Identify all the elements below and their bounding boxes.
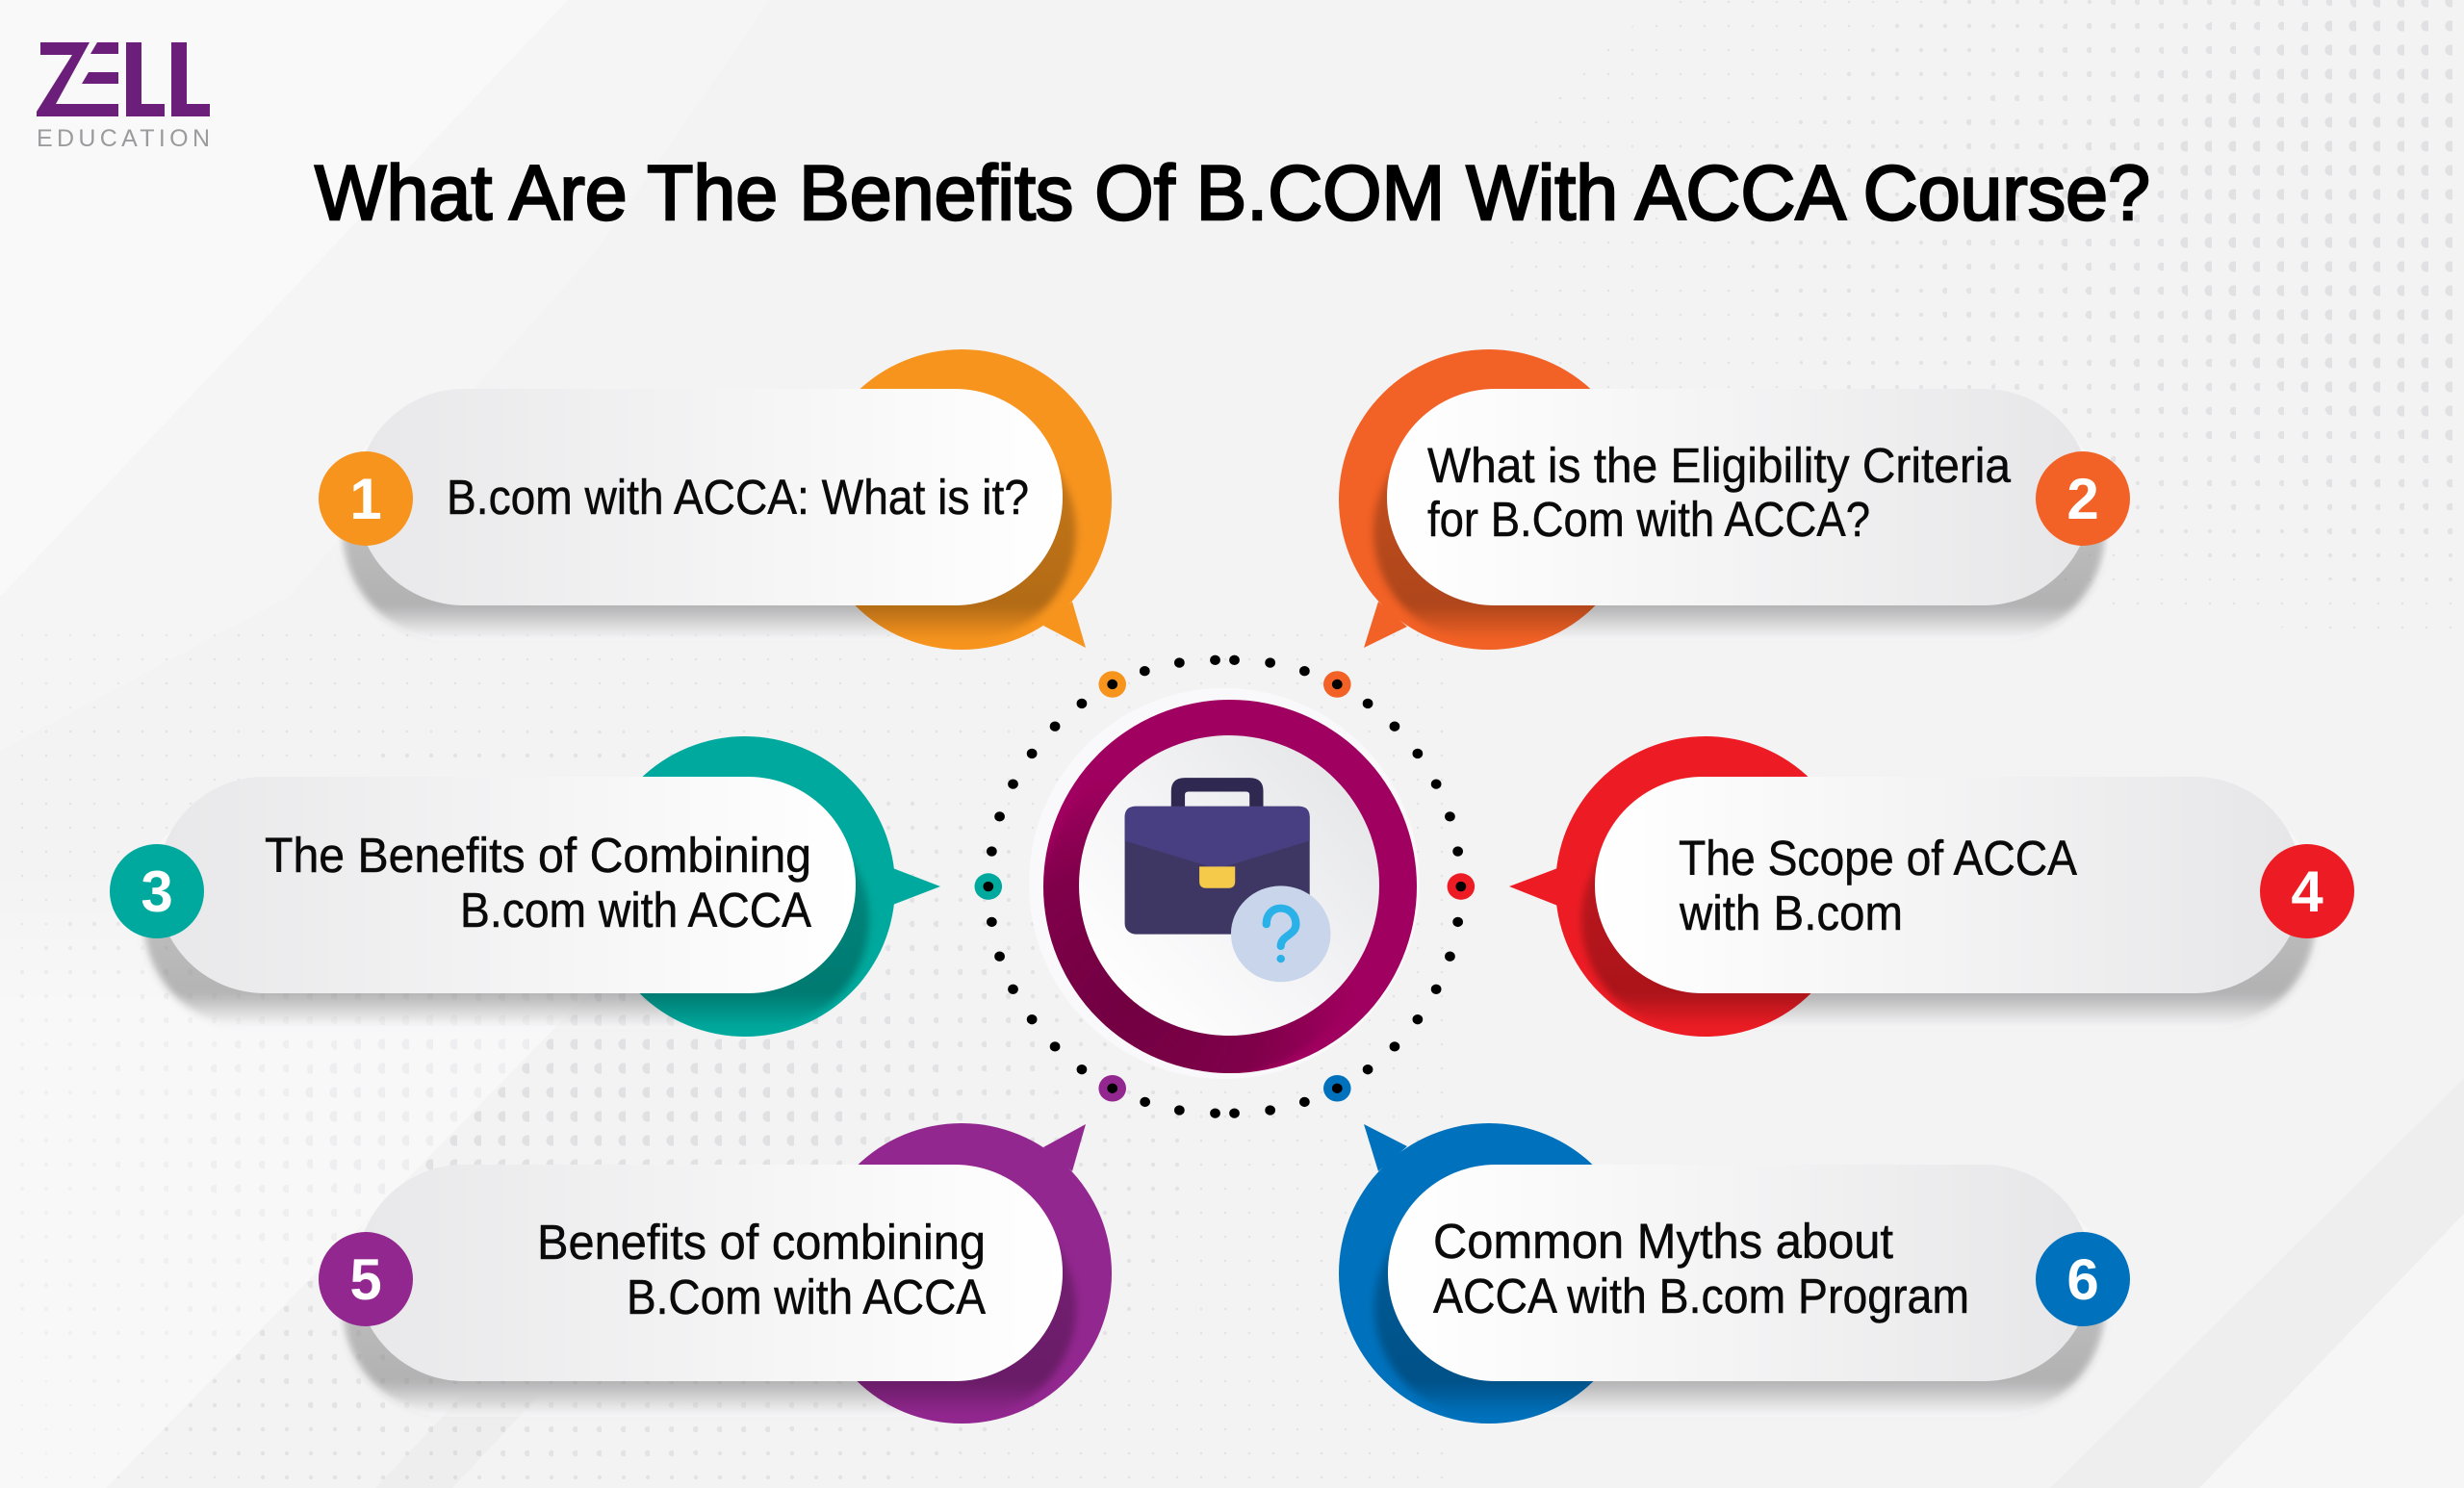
number badge 6 — [2036, 1232, 2130, 1326]
panel 4: scope of ACCA — [1509, 736, 2354, 1037]
purple speech bubble — [811, 1123, 1112, 1424]
label 5: Benefits of combining — [537, 1215, 986, 1270]
icon: briefcase with question mark — [1125, 778, 1330, 982]
label 6: ACCA with B.com Program — [1433, 1269, 1969, 1323]
number badge 1 — [319, 451, 413, 546]
panel 5: benefits of combining B.Com — [319, 1123, 1112, 1424]
question bubble — [1231, 885, 1330, 982]
pill shadow — [343, 1199, 1076, 1416]
question mark — [1267, 909, 1296, 962]
briefcase body — [1125, 807, 1310, 935]
number badge 2: 2 — [2066, 467, 2099, 531]
number badge 1: 1 — [349, 467, 382, 531]
label 2: for B.Com with ACCA? — [1427, 492, 1870, 547]
blue speech bubble — [1339, 1123, 1639, 1424]
panel 6: common myths — [1339, 1123, 2130, 1424]
center dotted ring — [974, 655, 1475, 1118]
label 5: B.Com with ACCA — [627, 1270, 986, 1324]
number badge 6: 6 — [2066, 1247, 2099, 1312]
magenta ring — [1043, 700, 1417, 1073]
red speech bubble — [1509, 736, 1856, 1037]
pill shadow — [1374, 1199, 2105, 1416]
white pill — [356, 1165, 1063, 1381]
white pill — [356, 389, 1063, 605]
number badge 3 — [110, 844, 204, 938]
inner white disc — [1079, 735, 1379, 1036]
white pill — [1388, 1165, 2092, 1381]
label 2: What is the Eligibility Criteria — [1427, 438, 2012, 493]
pill shadow — [1373, 423, 2105, 640]
label 6: Common Myths about — [1433, 1214, 1893, 1269]
halftone dots: lower left — [0, 616, 1444, 1488]
colored connector dots — [974, 671, 1475, 1102]
halftone dots: upper right — [1490, 0, 2464, 637]
number badge 4: 4 — [2291, 859, 2323, 924]
panel 2: eligibility criteria — [1339, 349, 2130, 650]
white pill — [1387, 389, 2092, 605]
white pill — [1595, 777, 2302, 993]
briefcase handle — [1171, 778, 1263, 811]
label 4: with B.com — [1679, 885, 1903, 940]
briefcase flap — [1125, 807, 1310, 869]
number badge 4 — [2260, 844, 2354, 938]
panel 3: benefits of combining — [110, 736, 940, 1037]
logo mark — [37, 42, 210, 116]
orange speech bubble — [811, 349, 1112, 650]
orange-red speech bubble — [1339, 349, 1639, 650]
pill shadow — [1581, 811, 2316, 1028]
briefcase clasp — [1199, 866, 1235, 888]
center emblem — [1029, 688, 1420, 1079]
number badge 3: 3 — [141, 859, 173, 924]
label 1: B.com with ACCA: What is it? — [447, 470, 1029, 525]
label 3 — [265, 828, 811, 937]
logo text: EDUCATION — [37, 125, 210, 152]
label 3: B.com with ACCA — [460, 883, 811, 937]
label 4 — [1679, 831, 2077, 940]
label 3: The Benefits of Combining — [265, 828, 811, 883]
panel 1: B.com with ACCA — [319, 349, 1112, 650]
label 5 — [537, 1215, 986, 1324]
white pill — [157, 777, 856, 993]
logo: Zell Education — [37, 42, 210, 152]
label 6 — [1433, 1214, 1969, 1323]
title: What Are The Benefits Of B.COM With ACCA Course? — [315, 150, 2150, 237]
teal speech bubble — [595, 736, 940, 1037]
label 2 — [1427, 438, 2012, 547]
pill shadow — [143, 811, 869, 1028]
black dots — [987, 655, 1463, 1118]
number badge 5 — [319, 1232, 413, 1326]
number badge 2 — [2036, 451, 2130, 546]
label 4: The Scope of ACCA — [1679, 831, 2077, 885]
number badge 5: 5 — [349, 1247, 382, 1312]
pill shadow — [343, 423, 1076, 640]
